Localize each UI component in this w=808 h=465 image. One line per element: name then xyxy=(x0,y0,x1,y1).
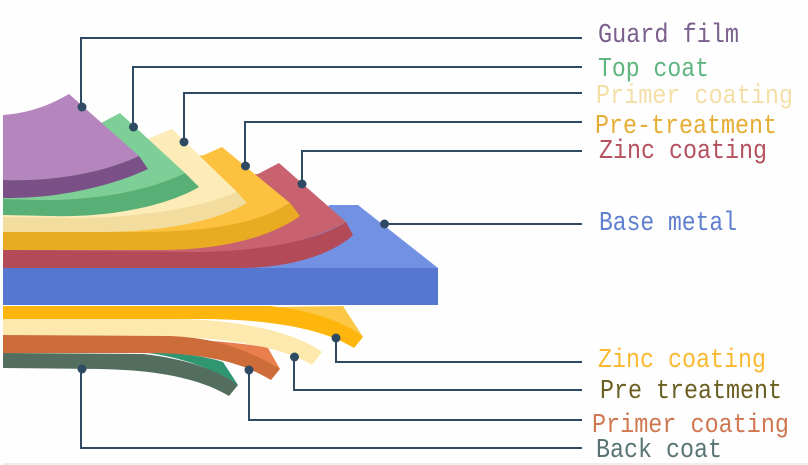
leader: back coat xyxy=(78,366,582,448)
layer: primer coating top xyxy=(3,129,247,232)
leader: zinc coating bottom xyxy=(332,334,582,362)
layer: base metal xyxy=(3,205,438,305)
leader: zinc coating xyxy=(298,151,582,188)
label: Base metal: Base metal xyxy=(599,209,737,239)
leader lines and dots xyxy=(78,38,582,448)
layer: primer coating bottom xyxy=(3,335,280,380)
layer: back coat xyxy=(3,353,238,396)
label: Pre treatment bottom: Pre treatment xyxy=(600,377,782,407)
leader: pre treatment bottom xyxy=(291,354,582,390)
layer: zinc coating bottom xyxy=(3,306,363,348)
leader: base metal xyxy=(381,220,582,228)
label: Pre-treatment: Pre-treatment xyxy=(595,112,777,142)
leader: guard film xyxy=(78,38,582,110)
layer: pre-treatment top xyxy=(3,147,300,250)
layer: zinc coating top xyxy=(3,163,353,268)
label: Zinc coating: Zinc coating xyxy=(599,137,767,167)
label: Guard film: Guard film xyxy=(598,21,739,51)
leader: primer coating bottom xyxy=(246,366,582,420)
label: Top coat: Top coat xyxy=(598,55,709,85)
layer: guard film xyxy=(3,94,148,198)
leader: primer coating xyxy=(180,93,582,146)
leader: top coat xyxy=(130,67,582,130)
layer: pre-treatment bottom xyxy=(3,319,322,365)
label: Zinc coating bottom: Zinc coating xyxy=(598,346,766,376)
layer: top coat xyxy=(3,113,199,216)
leader: pre-treatment xyxy=(242,122,582,170)
